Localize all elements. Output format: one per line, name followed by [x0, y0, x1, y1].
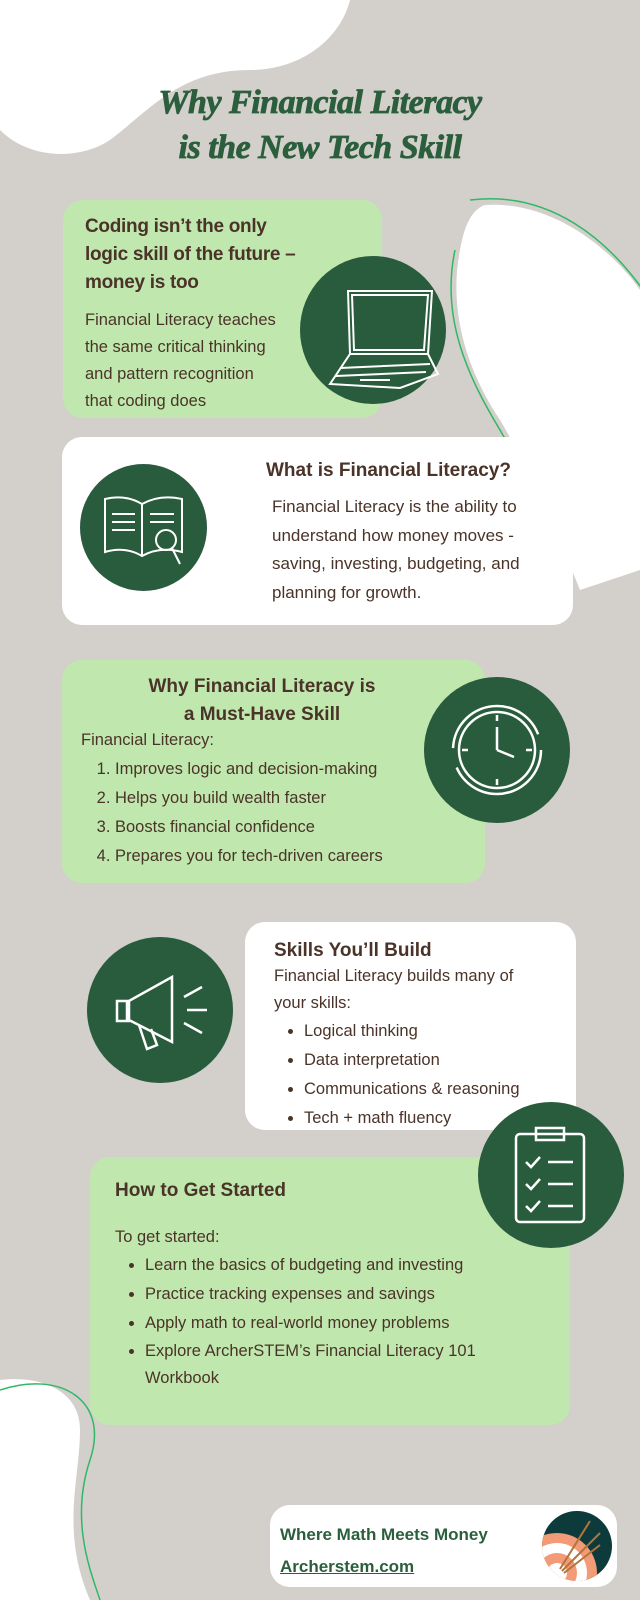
panel: coding — [63, 200, 382, 418]
heading: get started: How to Get Started — [115, 1180, 286, 1201]
heading: must-have — [148, 676, 376, 725]
text: coding: Financial Literacy teaches the same critical thinking and pattern recognition that coding does — [85, 311, 276, 410]
icon: megaphone — [87, 937, 233, 1083]
heading: must-have: Why Financial Literacy is — [148, 676, 376, 697]
title — [158, 84, 483, 166]
panel: get started — [90, 1157, 570, 1425]
list: skills: Data interpretation — [304, 1051, 440, 1069]
icon: laptop — [300, 256, 446, 404]
list: must-have: Helps you build wealth faster — [115, 789, 326, 807]
footer text — [280, 1525, 488, 1576]
heading: coding — [85, 216, 296, 293]
title: Why Financial Literacy — [158, 84, 482, 121]
heading: must-have: a Must-Have Skill — [184, 704, 340, 725]
icon: book — [80, 464, 207, 591]
list: get started: Practice tracking expenses and savings — [145, 1285, 435, 1303]
icon: clipboard — [478, 1102, 624, 1248]
text: what is: Financial Literacy is the ability to understand how money moves - saving, investing, budgeting, and planning for growth. — [272, 497, 520, 602]
footer — [270, 1505, 617, 1587]
list: must-have: Prepares you for tech-driven careers — [115, 847, 383, 865]
panel: what is — [62, 437, 573, 625]
heading: coding: logic skill of the future – — [85, 244, 295, 265]
list: skills — [274, 967, 520, 1127]
list: must-have — [81, 731, 383, 865]
panel: must-have — [62, 660, 485, 883]
icon: clock — [424, 677, 570, 823]
list: get started: Explore ArcherSTEM’s Financial Literacy 101 Workbook — [145, 1342, 476, 1387]
list: skills: Financial Literacy builds many of your skills: — [274, 967, 513, 1012]
list: skills: Logical thinking — [304, 1022, 418, 1040]
icon: logo target — [542, 1511, 612, 1581]
list: get started — [115, 1228, 476, 1387]
heading: what is: What is Financial Literacy? — [266, 460, 511, 481]
list: get started: Learn the basics of budgeting and investing — [145, 1256, 463, 1274]
list: get started: Apply math to real-world money problems — [145, 1314, 449, 1332]
list: must-have: Financial Literacy: — [81, 731, 214, 749]
heading: coding: money is too — [85, 272, 199, 293]
heading: coding: Coding isn’t the only — [85, 216, 267, 237]
list: skills: Communications & reasoning — [304, 1080, 520, 1098]
panel: skills — [245, 922, 576, 1130]
footer text: Archerstem.com — [280, 1557, 414, 1576]
list: must-have: Boosts financial confidence — [115, 818, 315, 836]
list: skills: Tech + math fluency — [304, 1109, 451, 1127]
title: is the New Tech Skill — [179, 129, 461, 166]
footer text: Where Math Meets Money — [280, 1525, 488, 1544]
list: must-have: Improves logic and decision-making — [115, 760, 377, 778]
list: get started: To get started: — [115, 1228, 220, 1246]
heading: skills: Skills You’ll Build — [274, 940, 432, 961]
